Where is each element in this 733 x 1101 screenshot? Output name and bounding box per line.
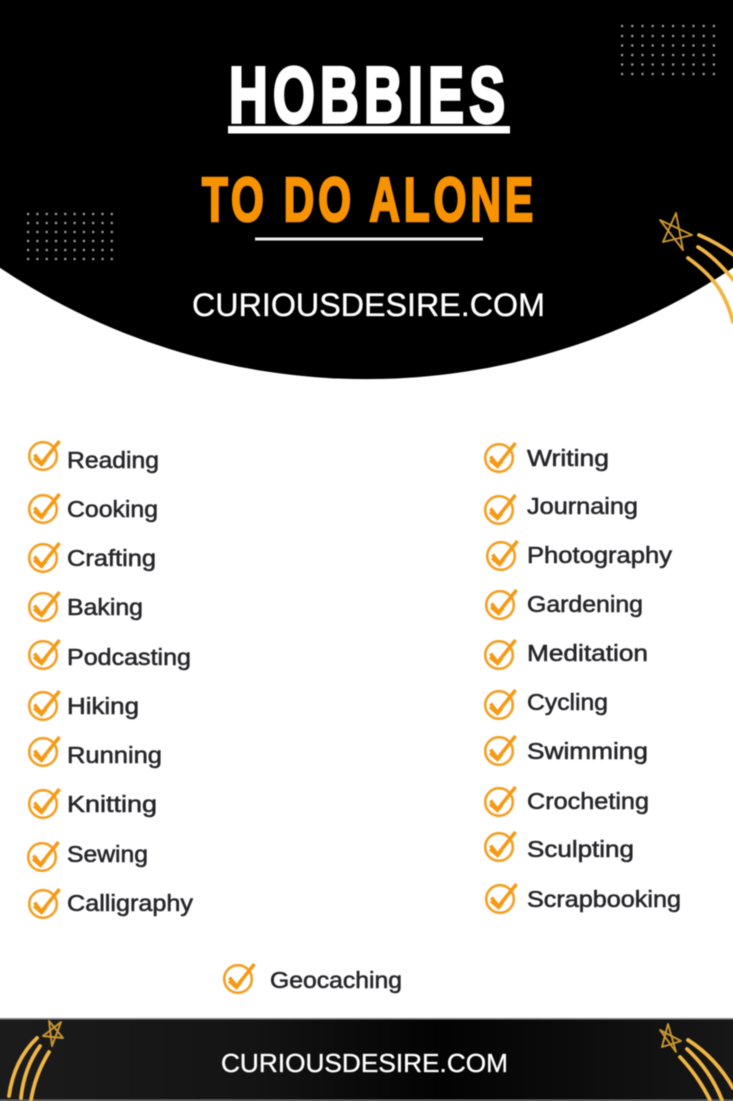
item: photography: Photography — [527, 542, 673, 568]
item: running: Running — [67, 742, 162, 768]
item: knitting — [29, 789, 157, 818]
item: crocheting: Crocheting — [527, 788, 649, 814]
header panel: black curved banner — [0, 0, 733, 379]
item: swimming — [485, 736, 648, 765]
item: calligraphy: Calligraphy — [67, 890, 194, 916]
subtitle underline — [255, 238, 483, 240]
footer panel — [0, 1018, 733, 1101]
subtitle: to do alone: TO DO ALONE — [202, 166, 533, 235]
item: podcasting — [29, 640, 191, 670]
item: sewing: Sewing — [67, 841, 148, 867]
item: cooking — [29, 494, 158, 523]
title: hobbies: HOBBIES — [229, 52, 505, 140]
item: gardening — [486, 590, 643, 619]
item: journaling: Journaing — [527, 493, 638, 519]
item: journaling — [485, 493, 638, 524]
dot pattern: left — [27, 214, 114, 259]
item: gardening: Gardening — [527, 591, 643, 617]
item: swimming: Swimming — [527, 738, 648, 764]
item: reading — [29, 441, 159, 473]
item: scrapbooking — [486, 884, 681, 913]
item: scrapbooking: Scrapbooking — [527, 886, 681, 912]
item: writing — [485, 443, 609, 472]
item: knitting: Knitting — [67, 791, 157, 817]
item: cooking: Cooking — [67, 496, 158, 522]
item: writing: Writing — [527, 445, 609, 471]
item: baking — [29, 592, 143, 621]
item: geocaching: Geocaching — [270, 967, 402, 993]
item: hiking — [29, 691, 139, 720]
item: crafting — [29, 543, 156, 572]
list: left column — [28, 441, 194, 918]
title underline — [228, 126, 510, 134]
item: sewing — [28, 841, 148, 871]
icon: shooting star footer left — [9, 1021, 63, 1100]
footer website label: CURIOUSDESIRE.COM — [221, 1048, 508, 1078]
item: photography — [487, 541, 673, 570]
item: meditation — [485, 640, 648, 669]
item: sculpting — [485, 832, 634, 862]
item: crafting: Crafting — [67, 545, 156, 571]
item: podcasting: Podcasting — [67, 644, 191, 670]
item: calligraphy — [29, 889, 194, 918]
website label: CURIOUSDESIRE.COM — [192, 287, 545, 323]
icon: shooting star top right — [660, 213, 733, 322]
item: meditation: Meditation — [527, 640, 648, 666]
dot pattern: top right — [621, 26, 716, 74]
item: running — [29, 737, 162, 768]
icon: shooting star footer right — [660, 1024, 733, 1100]
item: cycling: Cycling — [527, 689, 608, 715]
item: reading: Reading — [67, 447, 159, 473]
list: right column — [485, 443, 681, 913]
item: baking: Baking — [67, 594, 143, 620]
item: geocaching — [224, 964, 402, 993]
item: sculpting: Sculpting — [527, 836, 634, 862]
item: cycling — [485, 689, 608, 719]
item: crocheting — [485, 787, 649, 816]
item: hiking: Hiking — [67, 693, 139, 719]
